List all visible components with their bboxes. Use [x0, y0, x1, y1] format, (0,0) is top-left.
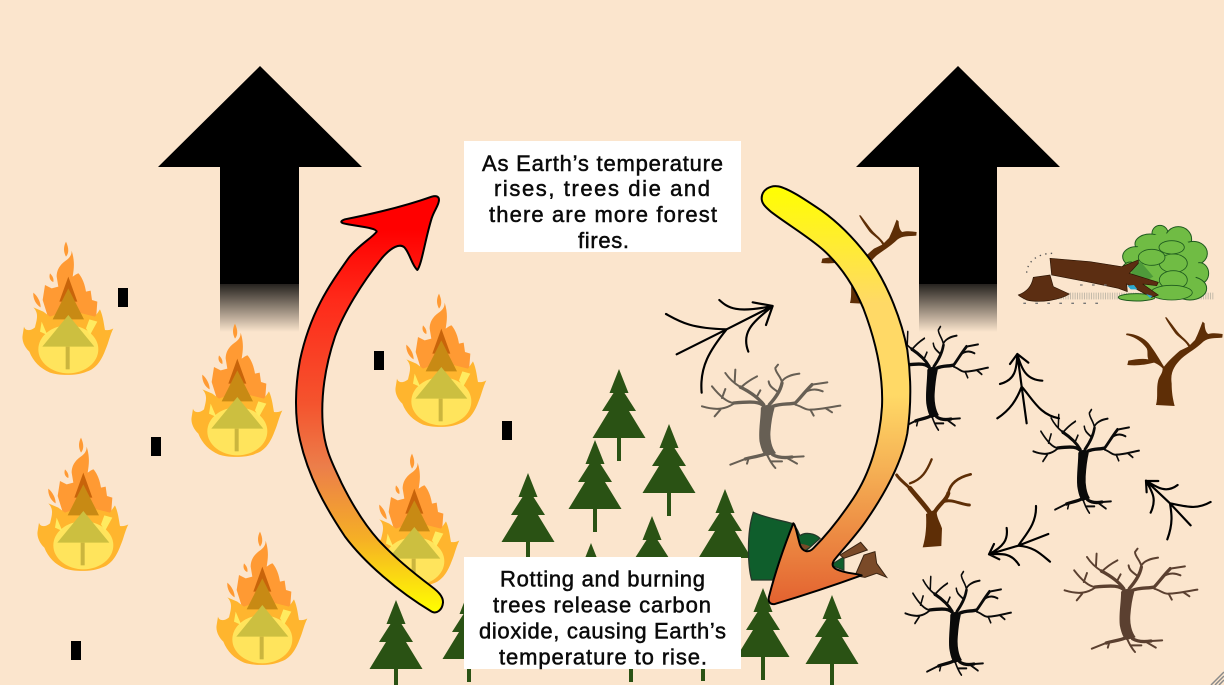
resize handle corner	[1211, 672, 1224, 685]
text box: carbon dioxide release: trees release carbon	[493, 592, 711, 618]
text box: temperature rises	[464, 141, 741, 253]
icon: burning tree 2	[191, 324, 282, 457]
black bare tree right	[1033, 410, 1139, 513]
line arrow upper left pointing	[1146, 481, 1211, 539]
yellow falling curved arrow	[762, 186, 910, 604]
icon: burning tree 4	[368, 454, 459, 587]
icon: burning tree 6	[216, 532, 307, 665]
line arrow pointing up	[997, 354, 1059, 423]
icon: burning tree 5	[37, 438, 128, 571]
text box: temperature rises: there are more forest	[489, 202, 717, 227]
burning trees	[22, 242, 486, 665]
small black markers	[71, 288, 512, 660]
dead tree behind arrow	[820, 215, 917, 304]
pine forest	[370, 369, 858, 685]
black bare tree behind arrow	[882, 327, 988, 430]
brown bare tree	[1065, 549, 1197, 652]
black bare tree bottom	[905, 572, 1011, 675]
icon: burning tree 3	[395, 294, 486, 427]
text box: temperature rises: rises, trees die and	[494, 176, 710, 201]
brown dead trees	[820, 215, 1223, 547]
dead tree lower	[897, 459, 971, 547]
text box: carbon dioxide release	[464, 557, 741, 670]
line arrow upper middle	[666, 300, 773, 393]
icon: fallen tree bucket behind arrowhead	[748, 512, 887, 580]
hand-drawn line arrows	[666, 300, 1211, 565]
icon: fallen tree and bush	[1018, 225, 1213, 303]
red rising curved arrow	[296, 196, 443, 612]
text box: carbon dioxide release: temperature to rise.	[499, 644, 707, 670]
right black up arrow	[856, 66, 1060, 332]
text box: temperature rises: As Earth’s temperature	[482, 151, 723, 176]
icon: burning tree 1	[22, 242, 113, 375]
line arrow pointing left	[989, 506, 1050, 565]
left black up arrow	[158, 66, 362, 332]
text box: temperature rises: fires.	[578, 228, 629, 253]
bare trees	[702, 327, 1197, 675]
text box: carbon dioxide release: Rotting and burning	[500, 566, 705, 592]
dead tree right	[1126, 317, 1223, 406]
text box: carbon dioxide release: dioxide, causing Earth’s	[479, 618, 726, 644]
gray bare tree	[702, 365, 840, 468]
